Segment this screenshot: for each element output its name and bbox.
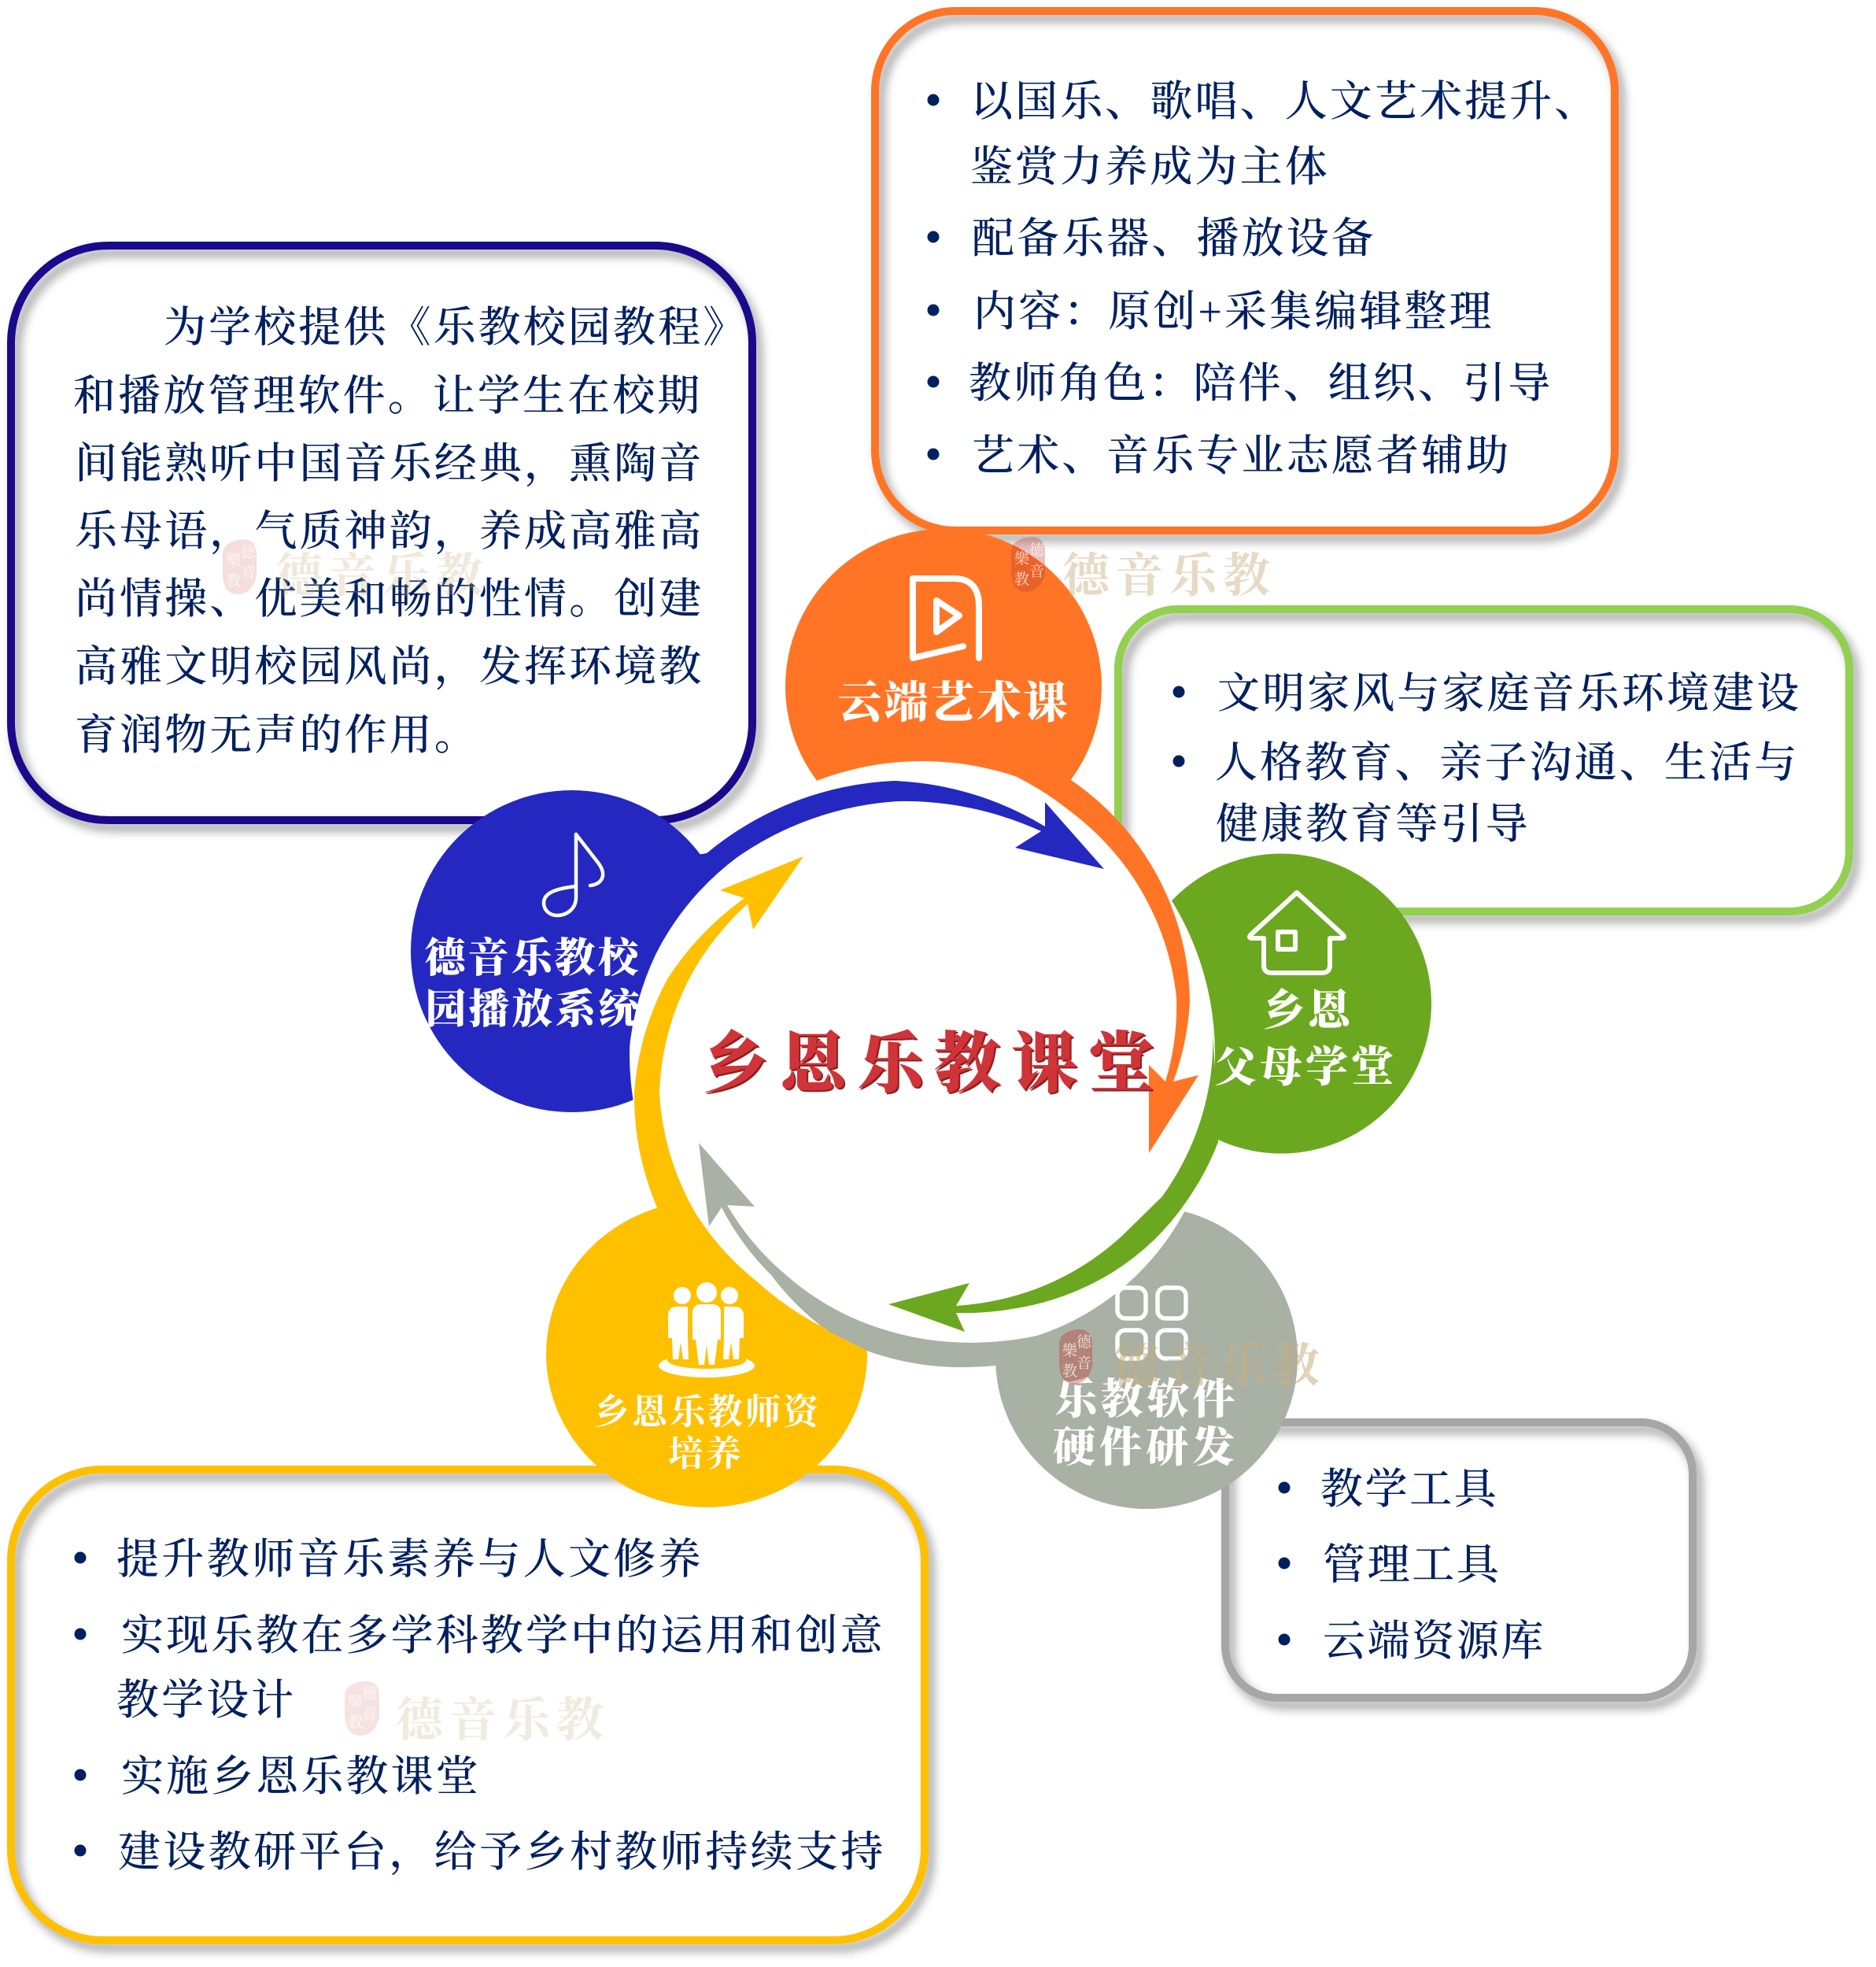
watermark: top right: 樂 [1014,550,1030,568]
watermark: teacher panel: 音 [362,1706,377,1723]
panel: teacher training list: 建设教研平台，给予乡村教师持续支持 [118,1828,886,1876]
panel: cloud art course list: 配备乐器、播放设备 [972,215,1376,262]
icon: video document [913,579,979,658]
watermark: software node: 樂 [1062,1342,1078,1359]
panel: software and hardware list [1225,1422,1693,1698]
arrow: grey cycle arrow [699,1143,1037,1367]
panel: software and hardware list: 教学工具 [1320,1466,1500,1513]
icon: music note [544,834,603,915]
watermark: software node [1059,1329,1326,1392]
watermark: left panel: 教 [226,572,241,590]
watermark: top right: 德 [1029,542,1045,559]
icon: group of teachers [659,1282,755,1377]
panel: parents school list: 文明家风与家庭音乐环境建设 [1217,670,1801,717]
watermark: left panel: 德 [241,544,257,561]
label: parents school [1214,987,1397,1091]
watermark: teacher panel: 樂 [348,1693,364,1710]
panel: parents school list: 健康教育等引导 [1216,800,1531,848]
watermark: software node: 德音乐教 [1112,1340,1326,1392]
label: school playback system: 园播放系统 [425,987,642,1033]
panel: cloud art course list: 教师角色：陪伴、组织、引导 [969,360,1553,407]
circle: yellow teacher node [546,1200,867,1507]
label: software and hardware [1053,1376,1239,1471]
panel: teacher training list: 教学设计 [116,1677,296,1724]
panel: school playback system description: 育润物无声的作用。 [75,712,479,759]
icon: house [1250,893,1344,973]
watermark: teacher panel [345,1681,610,1747]
central white disk [630,761,1215,1347]
watermark: top right: 教 [1014,571,1029,588]
panel: teacher training list: 实现乐教在多学科教学中的运用和创意 [121,1612,885,1659]
label: school playback system [424,936,642,1033]
arrow: green cycle arrow [888,1025,1218,1332]
arrow: yellow cycle arrow [634,856,828,1338]
icon: app grid [1117,1288,1186,1359]
panel: cloud art course list: 以国乐、歌唱、人文艺术提升、 [970,78,1599,125]
label: cloud art course: 云端艺术课 [837,679,1070,728]
panel: cloud art course list: 内容：原创+采集编辑整理 [973,288,1494,335]
watermark: left panel [223,539,489,602]
watermark: left panel: 德音乐教 [275,550,489,602]
label: parents school: 乡恩 [1263,987,1354,1034]
label: teacher training: 培养 [668,1434,744,1473]
panel: parents school list: 人格教育、亲子沟通、生活与 [1215,739,1799,786]
circle: grey software node [995,1207,1298,1509]
watermark: software node: 音 [1076,1355,1091,1372]
watermark: top right [1011,537,1276,602]
watermark: top right: 音 [1029,563,1044,580]
circle: green parents node [1131,853,1431,1154]
watermark: left panel: 音 [241,564,256,582]
panel: school playback system description [11,246,752,820]
arrow: orange cycle arrow [1017,777,1198,1153]
panel: teacher training list: 实施乡恩乐教课堂 [121,1753,481,1800]
panel: teacher training list: 提升教师音乐素养与人文修养 [116,1536,704,1583]
circle: blue system node [411,790,733,1112]
panel: school playback system description: 为学校提供《乐教校园教程》 [164,304,748,351]
watermark: left panel: 樂 [226,552,242,569]
panel: cloud art course list: 鉴赏力养成为主体 [970,143,1330,190]
label: teacher training: 乡恩乐教师资 [594,1392,822,1432]
panel: parents school list [1118,609,1849,911]
panel: software and hardware list: 管理工具 [1323,1541,1502,1588]
panel: school playback system description: 和播放管理软件。让学生在校期 [73,372,702,420]
panel: cloud art course list [875,11,1615,531]
watermark: software node: 教 [1062,1362,1077,1380]
watermark: teacher panel: 德音乐教 [396,1695,610,1747]
arrow: blue cycle arrow [598,781,1104,1055]
label: software and hardware: 乐教软件 [1054,1376,1239,1423]
panel: school playback system description: 间能熟听中国音乐经典，熏陶音 [75,440,704,487]
label: software and hardware: 硬件研发 [1053,1424,1239,1471]
panel: cloud art course list: 艺术、音乐专业志愿者辅助 [972,432,1511,479]
panel: school playback system description: 尚情操、优美和畅的性情。创建 [75,575,704,623]
watermark: top right: 德音乐教 [1062,550,1276,602]
watermark: software node: 德 [1076,1333,1092,1351]
title: 乡恩乐教课堂 [703,1028,1165,1101]
watermark: teacher panel: 教 [348,1714,363,1731]
watermark: teacher panel: 德 [362,1685,378,1703]
panel: school playback system description: 乐母语，气质神韵，养成高雅高 [75,508,704,555]
label: teacher training [594,1392,822,1473]
panel: school playback system description: 高雅文明校园风尚，发挥环境教 [75,643,704,690]
panel: teacher training list [11,1470,925,1940]
label: school playback system: 德音乐教校 [424,936,642,982]
label: parents school: 父母学堂 [1214,1044,1397,1091]
circle: orange art course node [785,529,1102,844]
panel: software and hardware list: 云端资源库 [1323,1618,1545,1665]
